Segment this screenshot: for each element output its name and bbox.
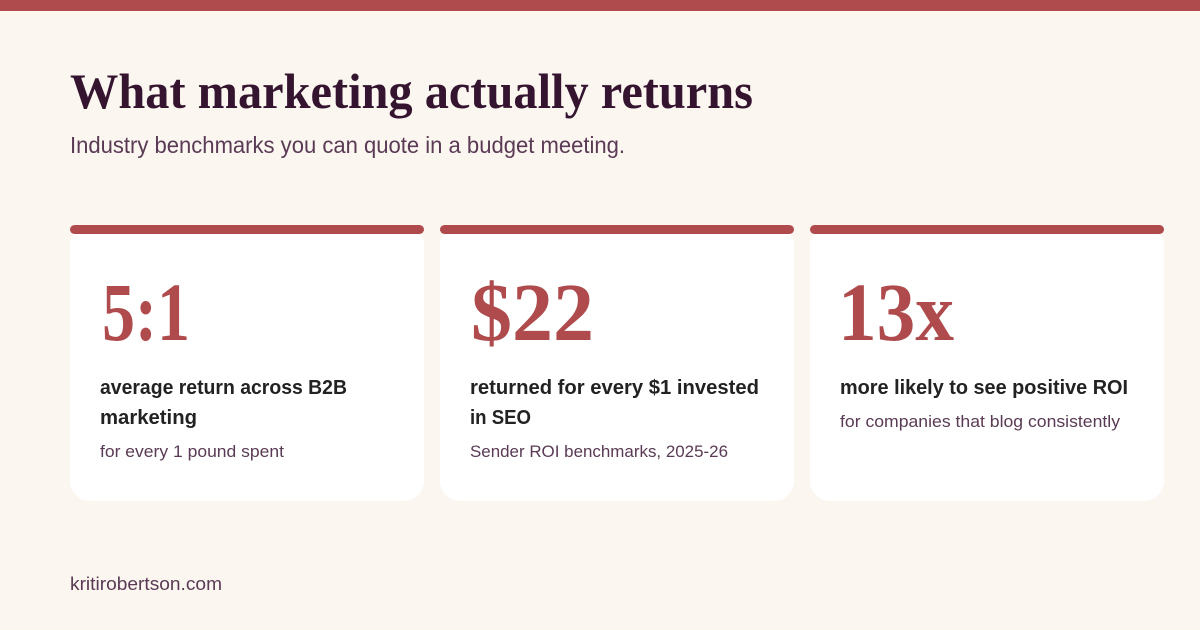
stat label second line: in SEO: [470, 407, 531, 429]
stat label: average return across B2B: [100, 377, 347, 399]
stat label: more likely to see positive ROI: [840, 377, 1128, 399]
stat label second line: marketing: [100, 407, 197, 429]
stat: $22: $22: [471, 266, 594, 358]
panel: $22 card: [440, 225, 794, 501]
panel: 13x card: [810, 225, 1164, 501]
subtitle: Industry benchmarks you can quote in a budget meeting.: [70, 132, 625, 158]
stat: 5:1: 5:1: [102, 266, 190, 358]
panel: 5:1 card: [70, 225, 424, 501]
footer: website: kritirobertson.com: [70, 573, 222, 594]
stat note: for companies that blog consistently: [840, 413, 1121, 431]
stat note: for every 1 pound spent: [100, 443, 284, 461]
top accent band: [0, 0, 1200, 11]
stat label: returned for every $1 invested: [470, 377, 759, 399]
stat note: Sender ROI benchmarks, 2025-26: [470, 443, 728, 461]
stat: 13x: 13x: [838, 266, 954, 358]
title: What marketing actually returns: [70, 63, 753, 119]
